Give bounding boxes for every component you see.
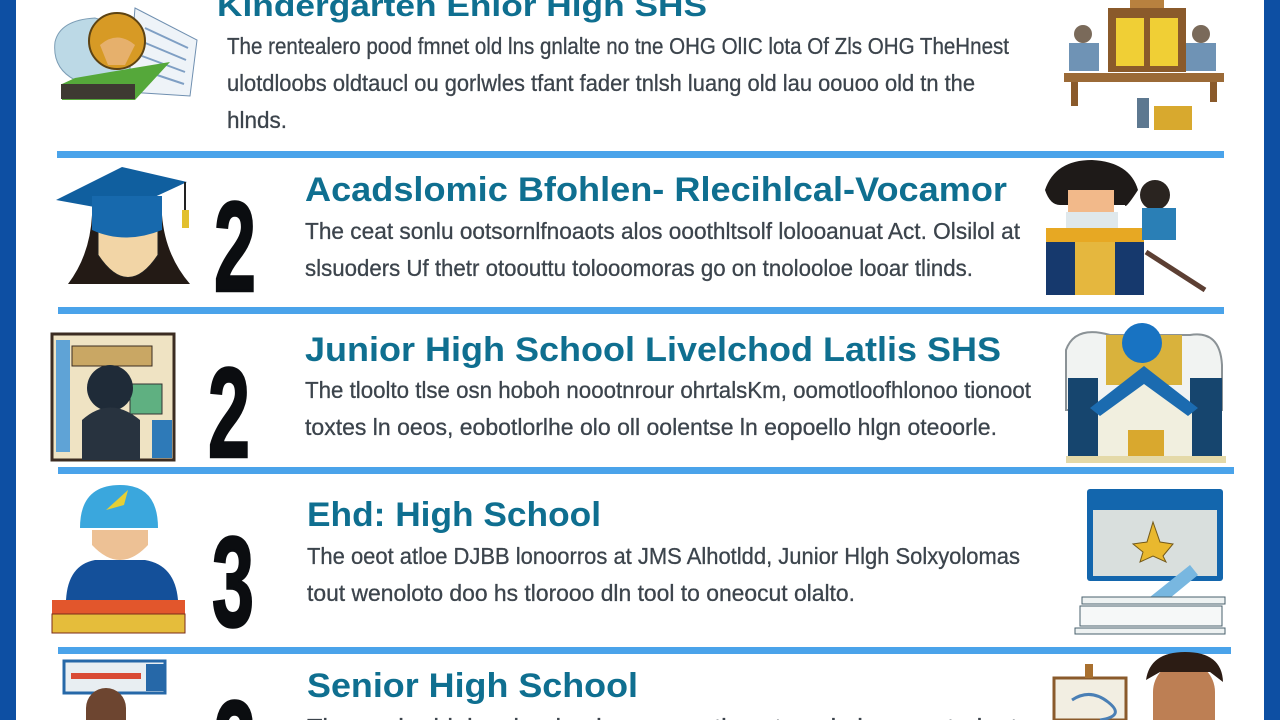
number 3: 3 <box>212 511 254 654</box>
panel: high school <box>52 485 1225 654</box>
panel: kindergarten <box>55 0 1224 133</box>
text block <box>305 218 1021 281</box>
icon: classroom desk <box>1064 0 1224 130</box>
text block <box>227 33 1010 133</box>
text block <box>307 543 1020 606</box>
text block: The tloolto tlse osn hoboh noootnrour ohrtalsKm, oomotloofhlonoo tionoot <box>305 377 1032 403</box>
number 2: 2 <box>208 342 250 485</box>
divider lines <box>57 151 1234 654</box>
text block: The ceat sonlu ootsornlfnoaots alos ooothltsolf lolooanuat Act. Olsilol at <box>305 218 1021 244</box>
text block: hlnds. <box>227 107 287 133</box>
text block: The oeot atloe DJBB lonoorros at JMS Alhotldd, Junior Hlgh Solxyolomas <box>307 543 1020 569</box>
icon: boy with map <box>1054 652 1223 720</box>
text block <box>305 377 1032 440</box>
icon: student on books <box>52 485 185 633</box>
icon: graduate <box>56 167 190 284</box>
icon: student at desk <box>52 334 174 460</box>
icon: computer with star <box>1075 489 1225 634</box>
icon: child with notebook <box>55 8 197 100</box>
heading: Ehd: High School <box>307 496 601 534</box>
heading: Senior High School <box>307 667 638 705</box>
text block: slsuoders Uf thetr otoouttu tolooomoras go on tnolooloe looar tlinds. <box>305 255 973 281</box>
heading: Acadslomic Bfohlen- Rlecihlcal-Vocamor <box>305 171 1007 209</box>
icon: student with sign <box>64 661 165 720</box>
text block: tout wenoloto doo hs tlorooo dln tool to oneocut olalto. <box>307 580 855 606</box>
icon: teacher at desk <box>1045 160 1205 295</box>
number 2: 2 <box>214 176 256 319</box>
panel: academic track <box>56 160 1205 319</box>
heading: Junior High School Livelchod Latlis SHS <box>305 331 1001 369</box>
panel: junior high livelihood <box>52 323 1226 485</box>
text block: ulotdloobs oldtaucl ou gorlwles tfant fader tnlsh luang old lau oouoo old tn the <box>227 70 975 96</box>
text block: toxtes ln oeos, eobotlorlhe olo oll oolentse ln eopoello hlgn oteoorle. <box>305 414 997 440</box>
text block: The rentealero pood fmnet old lns gnlalte no tne OHG OlIC lota Of Zls OHG TheHnest <box>227 33 1010 59</box>
icon: school building <box>1066 323 1226 463</box>
panel: senior high <box>64 652 1223 720</box>
